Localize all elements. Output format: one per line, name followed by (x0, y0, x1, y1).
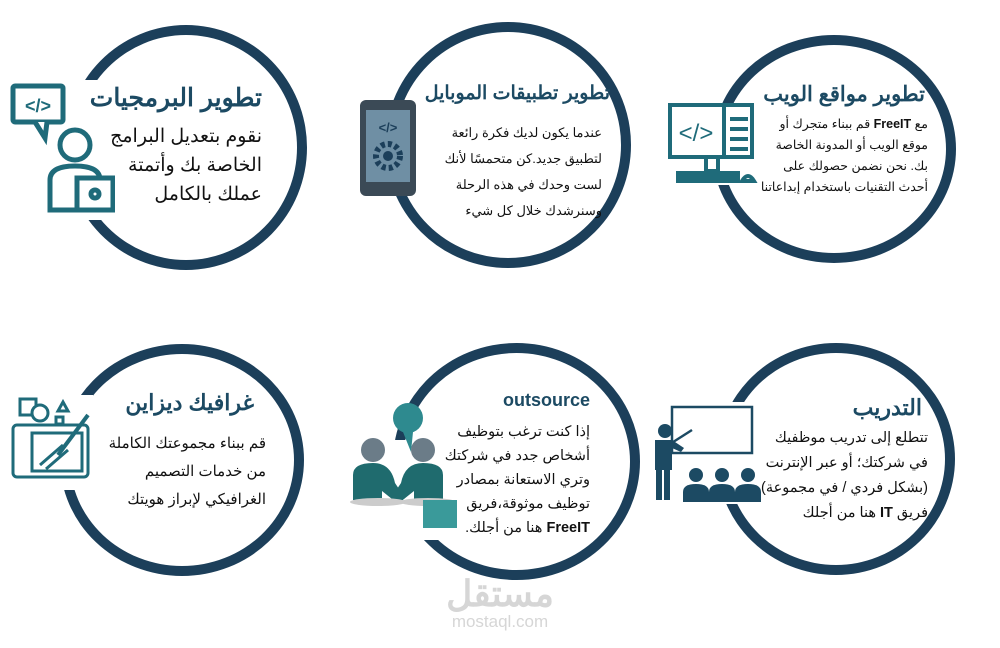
panel: graphic design (12, 344, 304, 576)
title: التدريب (853, 395, 922, 420)
body text: تتطلع إلى تدريب موظفيك في شركتك؛ أو عبر الإنترنت (بشكل فردي / في مجموعة) فريق IT هنا من أجلك (761, 430, 928, 521)
ring (65, 25, 307, 270)
ring (60, 344, 304, 576)
title: تطوير مواقع الويب (763, 83, 925, 106)
ring (712, 35, 956, 263)
icon: computer: </> (679, 120, 713, 147)
panel: web development (668, 35, 956, 263)
ring (385, 22, 631, 268)
body text: إذا كنت ترغب بتوظيف أشخاص جدد في شركتك وتري الاستعانة بمصادر توظيف موثوقة،فريق FreeIT هنا من أجلك. (445, 424, 590, 536)
body text: عندما يكون لديك فكرة رائعة لتطبيق جديد.كن متحمسًا لأنك لست وحدك في هذه الرحلة وسنرشدك خلال كل شيء (445, 125, 602, 218)
title: outsource (503, 390, 590, 410)
title: تطوير تطبيقات الموبايل (425, 83, 610, 104)
icon: phone with gear (360, 100, 416, 196)
body text: نقوم بتعديل البرامج الخاصة بك وأتمتة عملك بالكامل (110, 126, 262, 205)
title: تطوير البرمجيات (90, 84, 262, 112)
panel: software development (10, 25, 307, 270)
icon: phone with gear: </> (379, 120, 398, 135)
panel: mobile apps (360, 22, 631, 268)
icon: programmer: </> (25, 96, 51, 116)
watermark: mostaql.com (452, 612, 548, 631)
body text: قم ببناء مجموعتك الكاملة من خدمات التصميم الغرافيكي لإبراز هويتك (109, 435, 266, 508)
watermark: مستقل (446, 573, 554, 614)
ring (393, 343, 640, 580)
icon: programmer (10, 80, 115, 220)
title: غرافيك ديزاين (125, 390, 254, 415)
panel: training (655, 343, 955, 575)
icon: handshake (350, 403, 457, 540)
icon: computer (668, 103, 758, 185)
icon: classroom (655, 402, 761, 504)
ring (717, 343, 955, 575)
panel: outsource (350, 343, 640, 580)
body text: مع FreeIT قم ببناء متجرك أو موقع الويب أو المدونة الخاصة بك. نحن نضمن حصولك على أحدث التقنيات باستخدام إبداعاتنا (761, 117, 928, 194)
icon: drawing tablet (12, 395, 93, 490)
